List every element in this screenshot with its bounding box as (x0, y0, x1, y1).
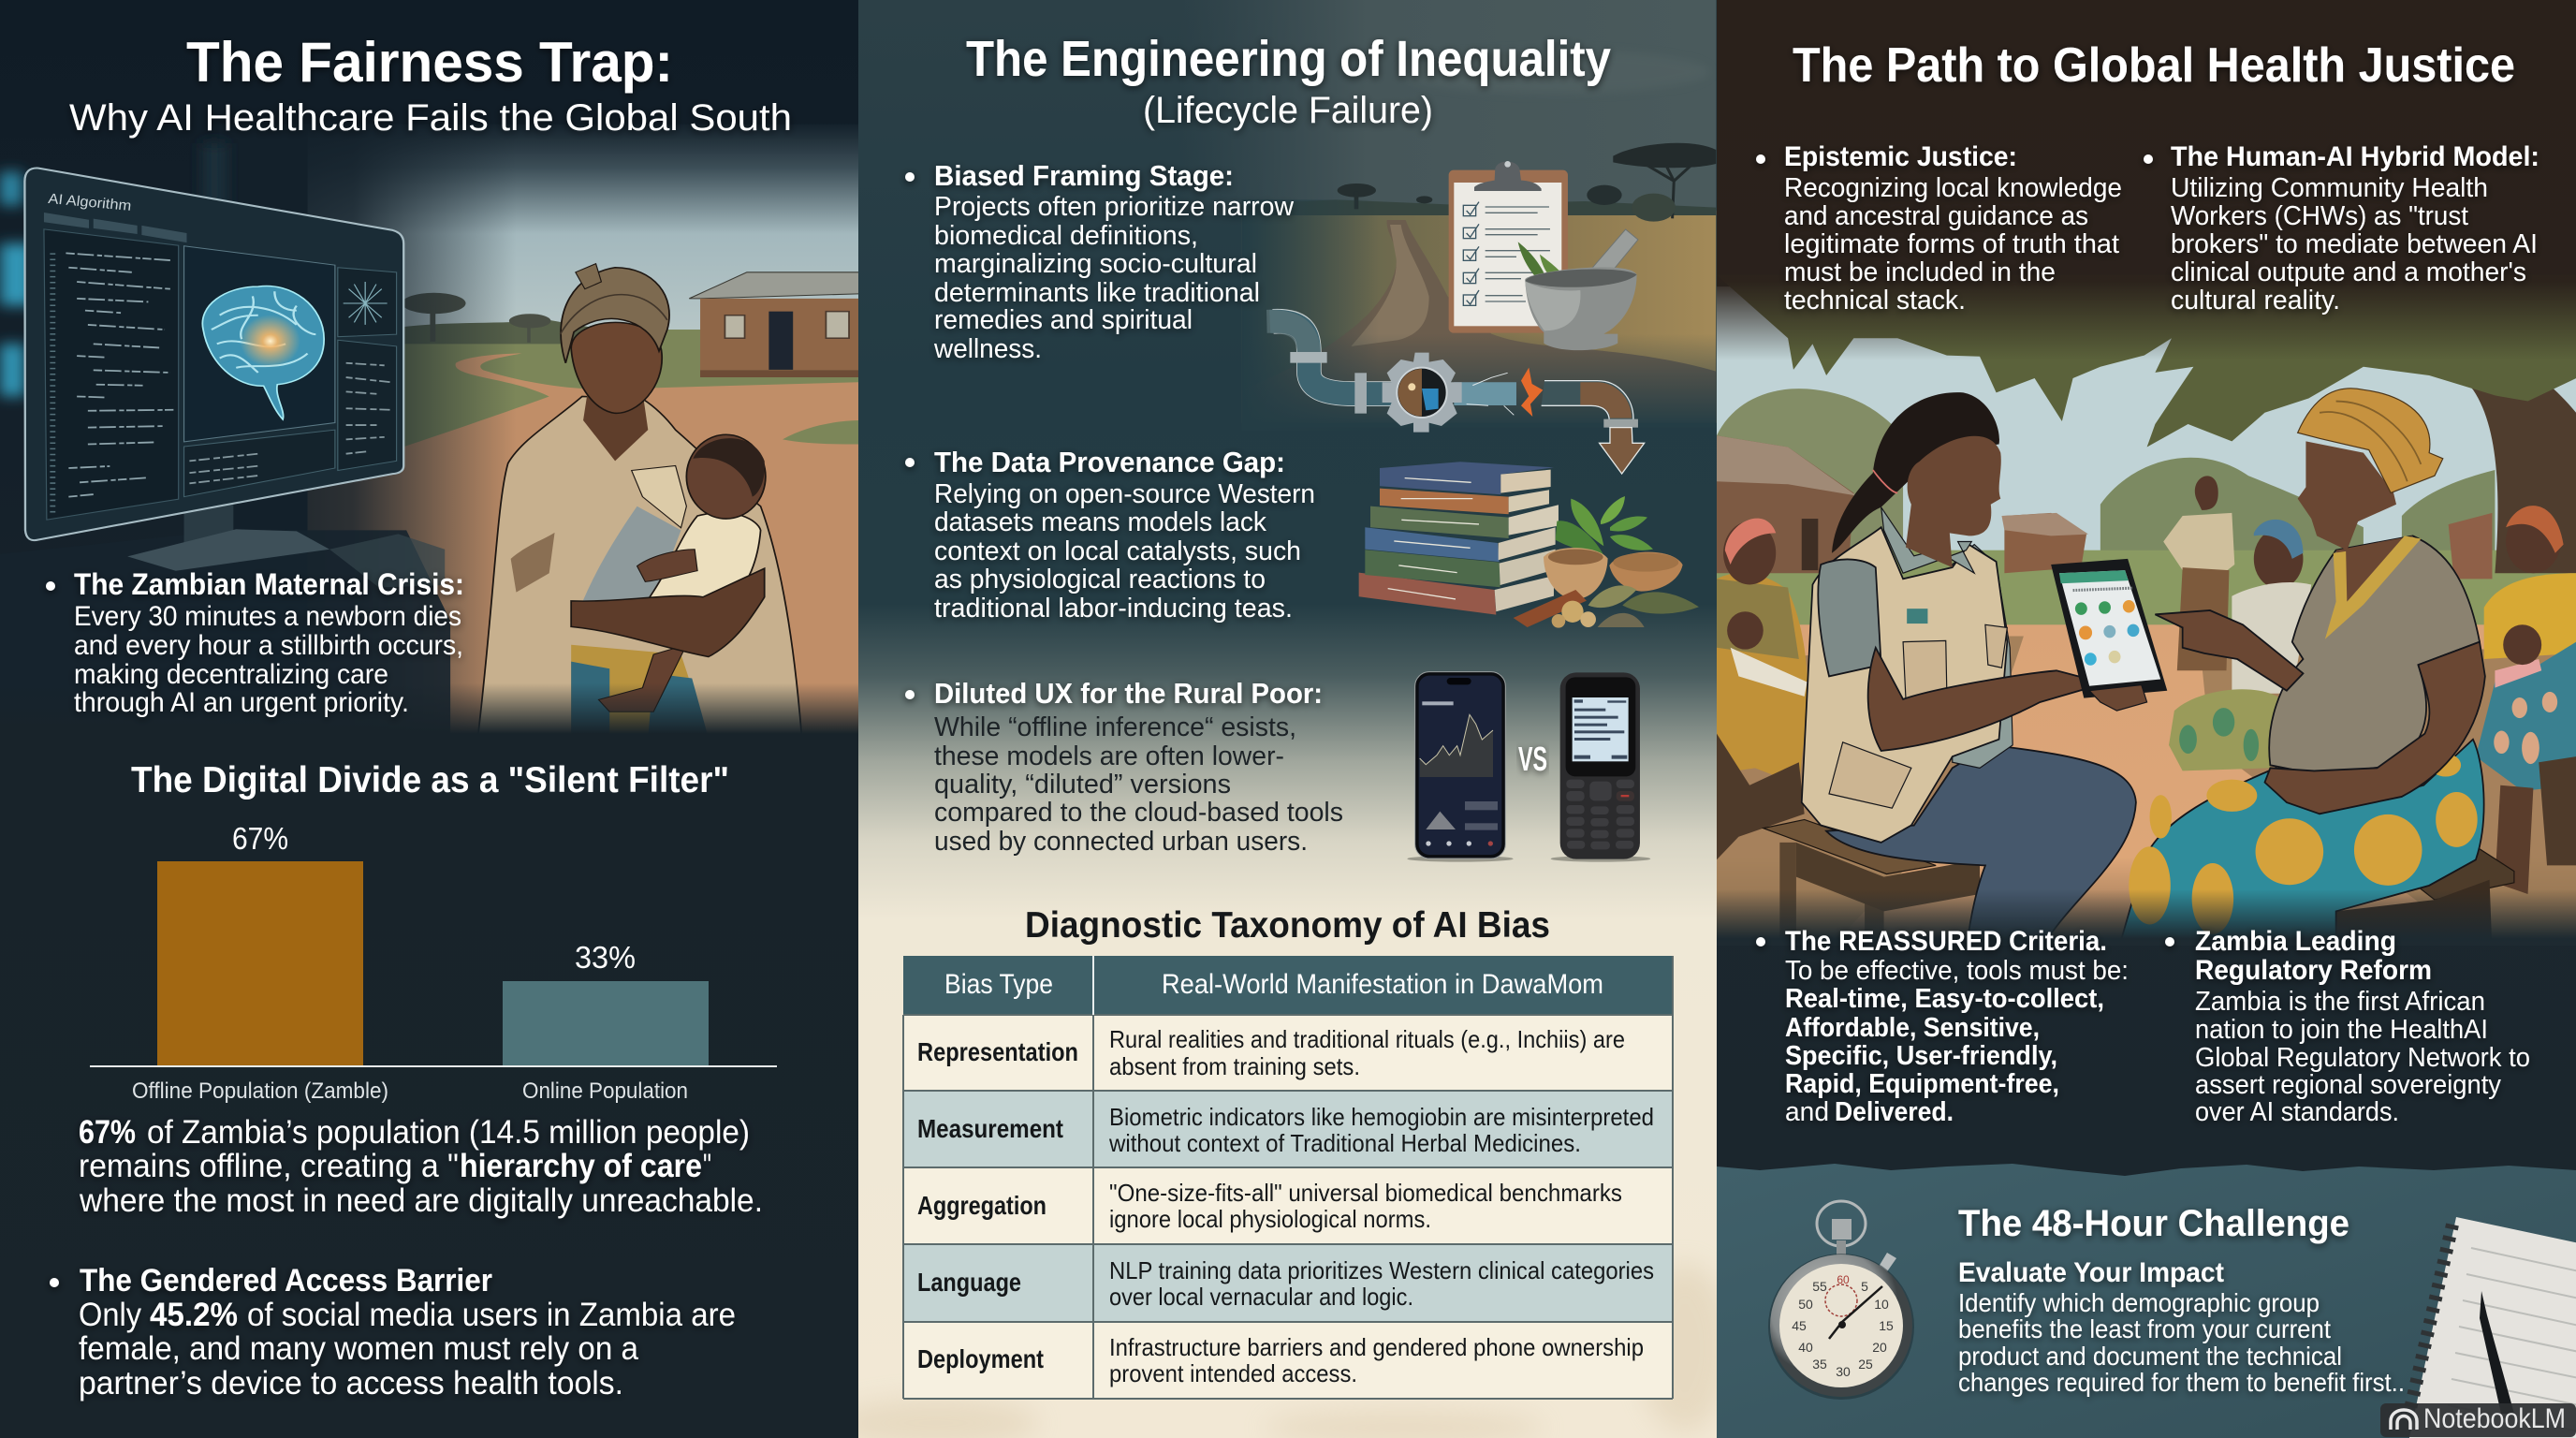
title: The Engineering of Inequality: The Engineering of Inequality (966, 31, 1611, 87)
text block: Zambian maternal crisis: Every 30 minutes a newborn dies (74, 601, 461, 632)
text block: REASSURED criteria: and (1785, 1097, 1829, 1127)
bar chart: offline vs online population: 33% (575, 940, 636, 975)
table: diagnostic taxonomy of AI bias: Real-World Manifestation in DawaMom (1162, 969, 1603, 1000)
bar chart: offline vs online population: 67% (232, 821, 288, 856)
text block: challenge body: Identify which demographic group (1958, 1288, 2320, 1317)
text block: data provenance gap: datasets means models lack (934, 507, 1266, 537)
text block: gendered access barrier: female, and many women must rely on a (79, 1330, 639, 1367)
text block: Zambia regulatory reform: Regulatory Reform (2195, 955, 2432, 986)
icon: spiral notebook and pen (2408, 1217, 2576, 1438)
icon: stopwatch: 30 (1836, 1364, 1851, 1379)
text block: diluted UX: Diluted UX for the Rural Poor: (934, 677, 1323, 710)
text block: gendered access barrier: of social media users in Zambia are (247, 1297, 736, 1333)
table: diagnostic taxonomy of AI bias: Rural realities and traditional rituals (e.g., Inchiis) are (1109, 1025, 1625, 1053)
text block: human-AI hybrid model: cultural reality. (2171, 286, 2340, 315)
icon: stopwatch (1768, 1201, 1914, 1400)
bar chart: offline vs online population: Offline Population (Zamble) (132, 1078, 388, 1104)
mother (2119, 740, 2484, 951)
illustration: stacked books and herbs (1359, 462, 1699, 628)
icon: stopwatch: 45 (1792, 1318, 1807, 1333)
text block: Zambia regulatory reform: Zambia is the first African (2195, 987, 2485, 1017)
table: diagnostic taxonomy of AI bias: Aggregation (917, 1191, 1046, 1220)
text block: biased framing stage (905, 159, 1295, 364)
illustration: monitor and Zambian mother scene (0, 125, 862, 742)
text block: Zambian maternal crisis: making decentralizing care (74, 659, 388, 690)
heading: digital divide: The Digital Divide as a "Silent Filter" (131, 760, 729, 800)
text block: Zambian maternal crisis: and every hour a stillbirth occurs, (74, 630, 463, 661)
text block: human-AI hybrid model: brokers" to mediate between AI (2171, 229, 2538, 259)
label: VS: VS (1518, 740, 1547, 778)
table: diagnostic taxonomy of AI bias: absent from training sets. (1109, 1052, 1360, 1080)
table: diagnostic taxonomy of AI bias: over local vernacular and logic. (1109, 1283, 1413, 1311)
panel: the fairness trap (left) (0, 0, 862, 1438)
text block: Zambia regulatory reform (2165, 926, 2530, 1127)
heading: 48-hour challenge (1958, 1203, 2349, 1288)
text block: gendered access barrier: Only (79, 1297, 141, 1333)
icon: stopwatch: 40 (1798, 1340, 1813, 1355)
background figures (1717, 573, 1808, 785)
table: diagnostic taxonomy of AI bias: NLP training data prioritizes Western clinical categories (1109, 1256, 1654, 1284)
text block: Zambia regulatory reform: nation to join the HealthAI (2195, 1015, 2488, 1045)
text block: hierarchy of care: of Zambia’s population (14.5 million people) (147, 1114, 750, 1151)
tablet (2051, 559, 2167, 698)
CHW (1826, 745, 2136, 951)
illustration: savanna road with clipboard, mortar and pipeline (1179, 0, 1716, 474)
text block: data provenance gap: as physiological reactions to (934, 565, 1266, 594)
text block: human-AI hybrid model: The Human-AI Hybrid Model: (2171, 141, 2539, 172)
text block: biased framing stage: remedies and spiritual (934, 305, 1193, 335)
table: diagnostic taxonomy of AI bias: Measurement (917, 1114, 1063, 1143)
title: The Path to Global Health Justice: The Path to Global Health Justice (1793, 38, 2515, 93)
text block: REASSURED criteria: Real-time, Easy-to-collect, (1785, 984, 2104, 1014)
table: diagnostic taxonomy of AI bias: ignore local physiological norms. (1109, 1205, 1431, 1233)
text block: diluted UX: While “offline inference“ esists, (934, 712, 1296, 742)
text block: hierarchy of care: remains offline, creating a " (79, 1148, 459, 1184)
illustration: community health worker with pregnant mother (1717, 0, 2576, 957)
table: diagnostic taxonomy of AI bias: "One-size-fits-all" universal biomedical benchmarks (1109, 1179, 1622, 1207)
illustration: parchment texture (833, 1264, 1732, 1438)
title: The Engineering of Inequality (966, 31, 1611, 131)
text block: data provenance gap: traditional labor-inducing teas. (934, 594, 1293, 624)
text block: biased framing stage: determinants like traditional (934, 278, 1260, 308)
text block: REASSURED criteria: The REASSURED Criteria. (1785, 926, 2107, 957)
icon: smartphone vs feature phone (1407, 672, 1650, 862)
table: diagnostic taxonomy of AI bias: Representation (917, 1037, 1078, 1066)
bar chart: offline vs online population: Online Population (522, 1078, 688, 1104)
text block: hierarchy of care: hierarchy of care (460, 1148, 702, 1184)
text block: diluted UX: used by connected urban users. (934, 827, 1308, 857)
text block: epistemic justice: and ancestral guidance as (1784, 201, 2088, 231)
text block: epistemic justice: must be included in the (1784, 257, 2056, 287)
text block: epistemic justice: Recognizing local knowledge (1784, 173, 2122, 203)
text block: hierarchy of care: 67% (79, 1114, 136, 1151)
icon: stopwatch: 5 (1861, 1279, 1868, 1294)
text block: gendered access barrier: 45.2% (150, 1297, 238, 1333)
text block: data provenance gap: Relying on open-source Western (934, 479, 1315, 509)
text block: epistemic justice: Epistemic Justice: (1784, 141, 2017, 172)
text block: Zambia regulatory reform: Global Regulatory Network to (2195, 1043, 2530, 1073)
text block: biased framing stage: wellness. (933, 334, 1042, 364)
table: diagnostic taxonomy of AI bias: Biometric indicators like hemogiobin are misinterpreted (1109, 1103, 1654, 1131)
icon: stopwatch: 10 (1874, 1297, 1889, 1312)
text block: gendered access barrier (50, 1263, 736, 1401)
text block: biased framing stage: Biased Framing Stage: (934, 159, 1234, 192)
text block: human-AI hybrid model (2144, 141, 2539, 315)
illustration: monitor and Zambian mother scene: AI Algorithm (48, 191, 132, 214)
text block: diluted UX: quality, “diluted” versions (934, 770, 1231, 800)
text block: diluted UX: compared to the cloud-based tools (934, 798, 1343, 828)
bar chart: offline vs online population (90, 821, 777, 1104)
text block: challenge body: product and document the technical (1958, 1342, 2342, 1371)
text block: data provenance gap: context on local catalysts, such (934, 536, 1301, 566)
text block: biased framing stage: Projects often prioritize narrow (934, 192, 1295, 222)
icon: stopwatch: 50 (1798, 1297, 1813, 1312)
icon: stopwatch: 60 (1837, 1273, 1850, 1286)
heading: 48-hour challenge: Evaluate Your Impact (1958, 1257, 2224, 1288)
text block: diluted UX (905, 677, 1343, 857)
text block: human-AI hybrid model: Utilizing Community Health (2171, 173, 2488, 203)
text block: gendered access barrier: The Gendered Access Barrier (80, 1263, 492, 1299)
table: diagnostic taxonomy of AI bias: without context of Traditional Herbal Medicines. (1108, 1129, 1581, 1157)
title: The Fairness Trap: Why AI Healthcare Fails the Global South (69, 97, 792, 139)
text block: REASSURED criteria (1756, 926, 2129, 1127)
text block: hierarchy of care (79, 1114, 763, 1219)
table: diagnostic taxonomy of AI bias: Infrastructure barriers and gendered phone ownership (1109, 1333, 1644, 1361)
text block: epistemic justice: technical stack. (1784, 286, 1966, 315)
text block: challenge body (1958, 1288, 2405, 1397)
icon: stopwatch: 35 (1812, 1357, 1827, 1372)
text block: Zambia regulatory reform: assert regional sovereignty (2195, 1070, 2501, 1100)
icon: stopwatch: 15 (1879, 1318, 1894, 1333)
heading: diagnostic taxonomy: Diagnostic Taxonomy of AI Bias (1025, 905, 1550, 946)
text block: data provenance gap: The Data Provenance Gap: (934, 446, 1285, 478)
title: The Fairness Trap: The Fairness Trap: (186, 31, 673, 94)
icon: stopwatch: 25 (1858, 1357, 1873, 1372)
text block: diluted UX: these models are often lower- (934, 741, 1284, 771)
table: diagnostic taxonomy of AI bias: provent intended access. (1109, 1359, 1357, 1387)
text block: REASSURED criteria: To be effective, tools must be: (1785, 956, 2129, 986)
title: The Engineering of Inequality: (Lifecycle Failure) (1143, 90, 1433, 131)
text block: epistemic justice (1756, 141, 2122, 315)
text block: epistemic justice: legitimate forms of truth that (1784, 229, 2119, 259)
text block: human-AI hybrid model: clinical outpute and a mother's (2171, 257, 2526, 287)
stools (1764, 819, 1936, 874)
text block: Zambian maternal crisis: through AI an urgent priority. (74, 687, 409, 718)
table: diagnostic taxonomy of AI bias: Bias Type (944, 969, 1053, 1000)
text block: Zambia regulatory reform: over AI standards. (2195, 1097, 2399, 1127)
heading: 48-hour challenge: The 48-Hour Challenge (1958, 1203, 2349, 1244)
text block: Zambia regulatory reform: Zambia Leading (2195, 926, 2396, 957)
text block: REASSURED criteria: Specific, User-friendly, (1785, 1041, 2057, 1071)
text block: REASSURED criteria: Delivered. (1835, 1097, 1954, 1127)
text block: challenge body: changes required for them to benefit first.. (1958, 1368, 2405, 1397)
text block: hierarchy of care: where the most in need are digitally unreachable. (79, 1182, 763, 1219)
text block: biased framing stage: biomedical definitions, (934, 221, 1198, 251)
table: diagnostic taxonomy of AI bias: Language (917, 1268, 1021, 1297)
title: The Fairness Trap (69, 31, 792, 139)
panel: the engineering of inequality (middle) (833, 0, 1732, 1438)
text block: REASSURED criteria: Affordable, Sensitive, (1785, 1013, 2040, 1043)
text block: biased framing stage: marginalizing socio-cultural (934, 249, 1257, 279)
icon: stopwatch: 55 (1812, 1279, 1827, 1294)
text block: human-AI hybrid model: Workers (CHWs) as "trust (2171, 201, 2468, 231)
text block: data provenance gap (905, 446, 1315, 624)
table: diagnostic taxonomy of AI bias: Deployment (917, 1344, 1044, 1373)
text block: Zambian maternal crisis (46, 567, 464, 718)
text block: hierarchy of care: " (703, 1148, 711, 1184)
text block: REASSURED criteria: Rapid, Equipment-free, (1785, 1069, 2059, 1099)
text block: gendered access barrier: partner’s device to access health tools. (79, 1365, 623, 1401)
panel: 48-hour challenge (1717, 1164, 2576, 1438)
text block: challenge body: benefits the least from your current (1958, 1314, 2331, 1343)
panel: the path to global health justice (right) (1717, 0, 2576, 1438)
text block: Zambian maternal crisis: The Zambian Maternal Crisis: (74, 567, 464, 601)
table: diagnostic taxonomy of AI bias (903, 956, 1673, 1399)
icon: stopwatch: 20 (1872, 1340, 1887, 1355)
